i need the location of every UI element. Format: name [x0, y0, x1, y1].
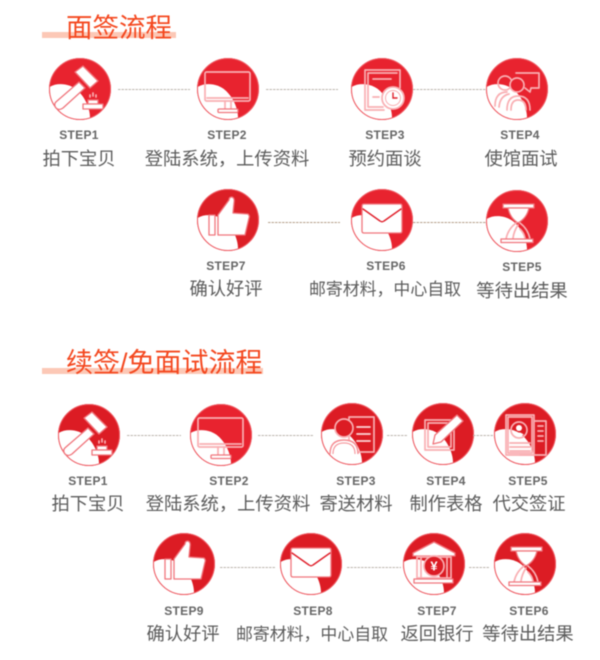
step 5: 等待出结果: 等待出结果 — [476, 280, 568, 301]
step 6: 等待出结果 — [482, 533, 574, 644]
step 5: 代交签证: STEP5 — [508, 474, 548, 488]
step 8: 邮寄材料，中心自取: 邮寄材料，中心自取 — [236, 625, 388, 644]
icon: bank: ¥ — [430, 558, 438, 574]
step 5: 等待出结果: STEP5 — [502, 260, 542, 274]
step 9: 确认好评 — [146, 533, 220, 644]
step 2: 登陆系统，上传资料 — [146, 404, 310, 514]
step 5: 等待出结果 — [476, 190, 568, 301]
step 2: 登陆系统，上传资料: 登陆系统，上传资料 — [145, 148, 309, 169]
step 2: 登陆系统，上传资料: STEP2 — [207, 128, 247, 142]
step 1: 拍下宝贝: 拍下宝贝 — [42, 148, 116, 169]
step 2: 登陆系统，上传资料: STEP2 — [209, 474, 249, 488]
icon: people and speech bubble — [495, 73, 539, 110]
icon: document and clock — [365, 70, 404, 110]
connector — [469, 566, 489, 568]
connector — [413, 222, 487, 224]
step 5: 代交签证: 代交签证 — [492, 493, 566, 514]
connector — [347, 566, 401, 568]
step 4: 制作表格 — [409, 403, 483, 514]
connector — [268, 222, 340, 224]
step 7: 确认好评: STEP7 — [206, 259, 246, 273]
step 6: 等待出结果: 等待出结果 — [482, 623, 574, 644]
step 2: 登陆系统，上传资料 — [145, 58, 309, 169]
step 3: 寄送材料: 寄送材料 — [319, 493, 393, 514]
step 7: 返回银行 — [400, 533, 474, 644]
step 3: 预约面谈: 预约面谈 — [348, 148, 422, 169]
step 7: 确认好评 — [189, 189, 263, 299]
title: 续签/免面试流程: 续签/免面试流程 — [66, 348, 263, 378]
connector — [413, 88, 487, 90]
step 2: 登陆系统，上传资料: 登陆系统，上传资料 — [146, 493, 310, 514]
step 6: 邮寄材料，中心自取: 邮寄材料，中心自取 — [309, 280, 461, 299]
step 3: 预约面谈: STEP3 — [365, 128, 405, 142]
icon: passport document — [506, 415, 546, 455]
step 3: 预约面谈 — [348, 58, 422, 169]
step 9: 确认好评: 确认好评 — [146, 623, 220, 644]
connector — [258, 434, 313, 436]
icon: profile card — [330, 417, 374, 454]
step 1: 拍下宝贝: STEP1 — [59, 128, 99, 142]
step 7: 返回银行: STEP7 — [417, 604, 457, 618]
step 8: 邮寄材料，中心自取 — [236, 533, 388, 644]
step 1: 拍下宝贝: 拍下宝贝 — [51, 493, 125, 514]
title: 面签流程: 面签流程 — [66, 13, 172, 43]
connector — [266, 88, 338, 90]
step 9: 确认好评: STEP9 — [164, 604, 204, 618]
connector — [220, 566, 275, 568]
connector — [387, 434, 408, 436]
step 6: 邮寄材料，中心自取 — [309, 189, 461, 299]
step 4: 制作表格: STEP4 — [426, 474, 466, 488]
step 4: 制作表格: 制作表格 — [409, 493, 483, 514]
step 1: 拍下宝贝: STEP1 — [68, 474, 108, 488]
step 1: 拍下宝贝 — [42, 58, 116, 169]
step 3: 寄送材料 — [319, 403, 393, 514]
step 7: 确认好评: 确认好评 — [189, 278, 263, 299]
step 4: 使馆面试: STEP4 — [500, 128, 540, 142]
step 5: 代交签证 — [492, 403, 566, 514]
step 1: 拍下宝贝 — [51, 404, 125, 514]
step 4: 使馆面试: 使馆面试 — [484, 148, 558, 169]
connector — [473, 434, 494, 436]
step 6: 等待出结果: STEP6 — [509, 604, 549, 618]
step 8: 邮寄材料，中心自取: STEP8 — [293, 604, 333, 618]
connector — [127, 434, 181, 436]
step 6: 邮寄材料，中心自取: STEP6 — [366, 259, 406, 273]
step 7: 返回银行: 返回银行 — [400, 623, 474, 644]
step 4: 使馆面试 — [484, 58, 558, 169]
step 3: 寄送材料: STEP3 — [336, 474, 376, 488]
icon: form and pencil — [425, 415, 463, 450]
connector — [118, 88, 190, 90]
